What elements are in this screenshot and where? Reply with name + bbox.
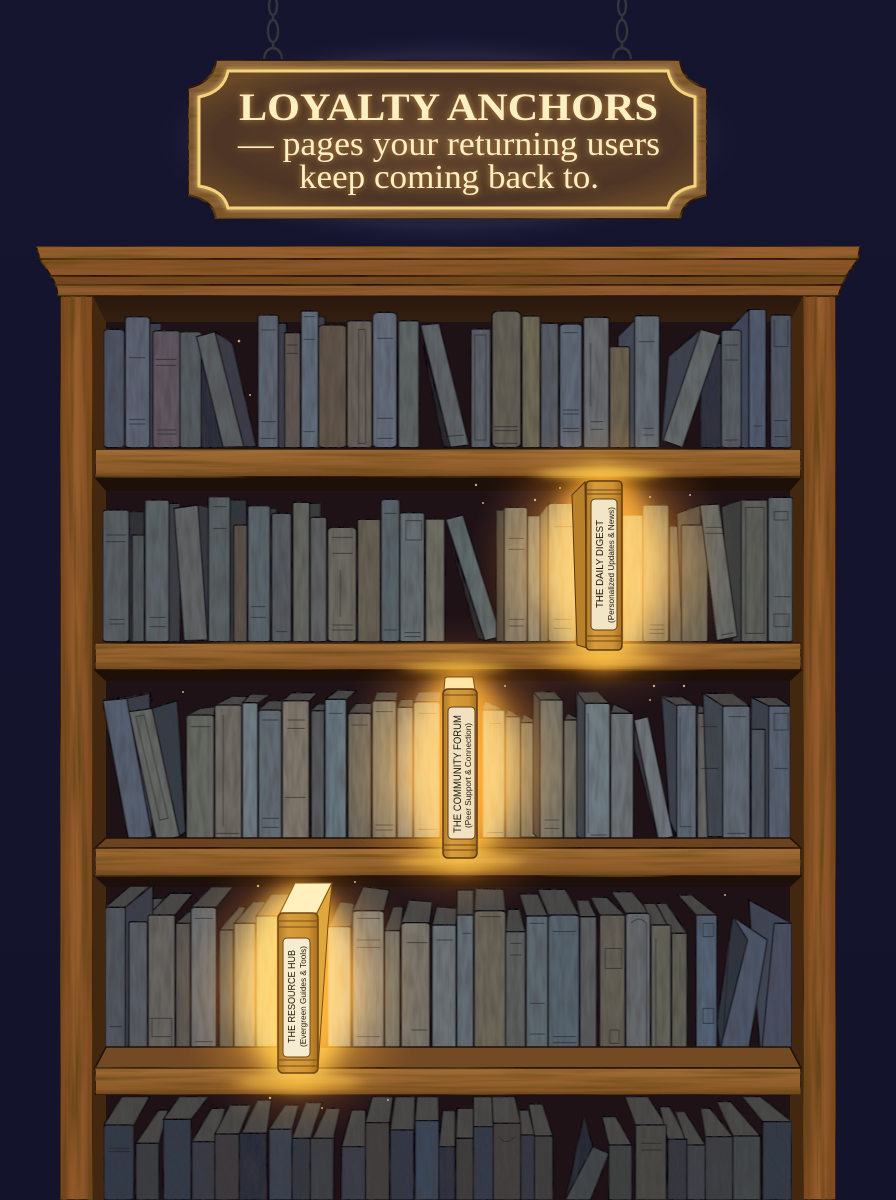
book title: THE RESOURCE HUB — [287, 950, 298, 1043]
shelf 2 underside — [95, 670, 801, 680]
icon: right hanging chain — [613, 0, 631, 59]
shelf 4 top surface — [95, 1047, 801, 1068]
shelf 4 — [95, 1068, 801, 1095]
book subtitle: (Peer Support & Connection) — [463, 723, 473, 828]
shelf 1 — [95, 449, 801, 477]
left inner side panel — [93, 296, 106, 1200]
featured book: The Resource Hub — [278, 883, 332, 1073]
crown moulding — [36, 246, 860, 296]
shelf 1 underside — [95, 477, 801, 490]
featured book: The Community Forum — [443, 677, 477, 858]
book row 3 — [103, 690, 790, 843]
panel: bookcase frame — [36, 246, 860, 1200]
panel: hanging wooden sign — [148, 32, 748, 248]
book row 5 — [104, 1097, 792, 1200]
featured book: The Daily Digest — [572, 481, 622, 650]
shelf 2 — [95, 643, 801, 670]
right inner side panel — [790, 296, 803, 1200]
subtitle line one: — pages your returning users — [237, 126, 660, 163]
book subtitle: (Personalized Updates & News) — [607, 507, 616, 623]
left post — [60, 296, 93, 1200]
title: LOYALTY ANCHORS — [239, 86, 658, 129]
subtitle line two: keep coming back to. — [299, 159, 599, 196]
floating dust sparkles — [182, 340, 726, 1109]
book row 2 — [103, 497, 793, 642]
right post — [803, 296, 836, 1200]
book row 4 — [105, 883, 792, 1057]
shelf 3 underside — [95, 876, 801, 886]
book title: THE COMMUNITY FORUM — [452, 715, 464, 833]
glow: light from featured books — [170, 415, 738, 1145]
shelf 3 top surface — [95, 838, 801, 848]
shelf 3 — [95, 848, 801, 876]
shelf boards — [95, 449, 801, 1095]
book row 1 — [104, 309, 791, 448]
icon: left hanging chain — [264, 0, 282, 59]
book title: THE DAILY DIGEST — [595, 520, 606, 608]
book subtitle: (Evergreen Guides & Tools) — [299, 946, 308, 1047]
